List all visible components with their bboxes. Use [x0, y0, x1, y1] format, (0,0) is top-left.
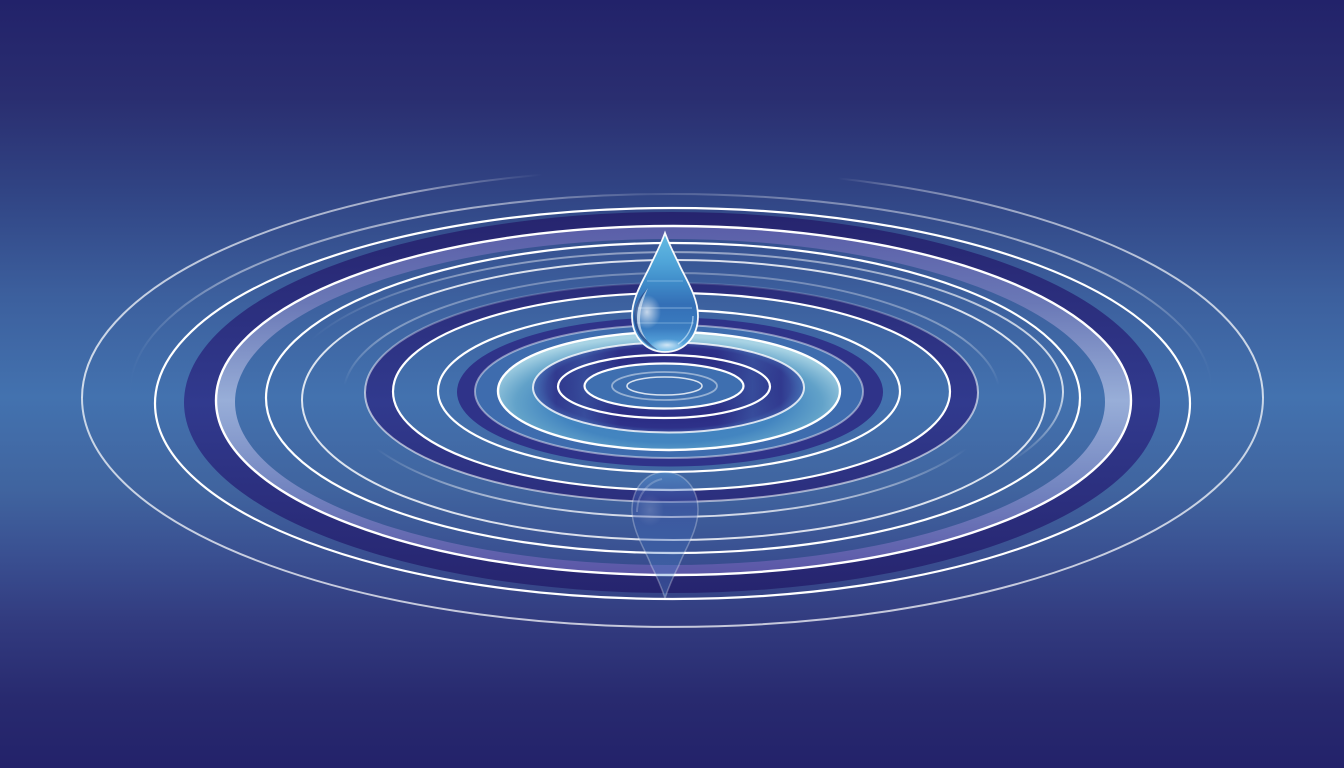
white ripple ring 3 — [266, 243, 1080, 553]
white ripple ring 5 — [393, 293, 950, 490]
drop: left highlight glow — [633, 295, 661, 329]
white ripple ring 6 — [438, 310, 900, 472]
inner water surface — [235, 239, 1105, 565]
central ripple rings — [533, 342, 804, 432]
drop: bottom glow — [650, 339, 684, 351]
outer ripple ring — [82, 169, 1263, 627]
blue ring with grey edge — [475, 325, 863, 458]
reflection of water drop — [632, 472, 698, 598]
white ripple ring 2 — [155, 208, 1190, 599]
faint partial ripple arc, outer — [130, 194, 1212, 392]
dark blue wave band — [184, 212, 1160, 593]
faint partial ripple arc, inner — [344, 273, 1000, 517]
drop: right shine — [678, 316, 693, 344]
dark blue inner wave band — [365, 283, 978, 502]
white ripple ring 4 — [302, 260, 1045, 540]
drop: left dark rim — [634, 288, 658, 350]
water drop — [632, 233, 698, 352]
lavender wave band with white edge — [216, 226, 1131, 575]
dark blue band around centre — [457, 318, 883, 466]
glowing central ripple disc — [498, 332, 840, 450]
drop: left crescent shine — [637, 288, 648, 340]
dark inner disc — [533, 342, 804, 432]
drop: refracted ripple lines — [636, 281, 694, 323]
faint partial ripple arc, middle — [311, 252, 1063, 460]
